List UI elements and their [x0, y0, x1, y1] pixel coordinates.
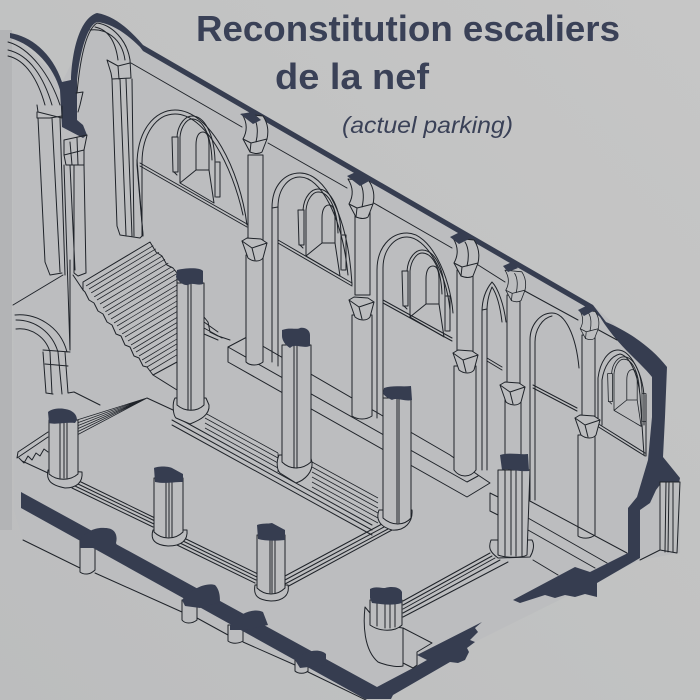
title: de la nef	[275, 56, 430, 97]
floor right and low walls	[490, 493, 627, 575]
stair band: F1 to F3	[172, 413, 378, 535]
dark wall buttress blobs	[80, 528, 326, 668]
engaged column E	[575, 310, 600, 538]
stair band: R1 to R2	[72, 482, 155, 527]
bottom wall outline	[23, 540, 368, 700]
engaged column C	[453, 238, 479, 476]
column R5 large pier	[490, 454, 533, 558]
column R2	[152, 466, 187, 546]
stair band: R3 to F3	[285, 524, 392, 588]
column F3	[378, 386, 412, 530]
arch 6 with window	[598, 350, 646, 456]
engaged column D	[500, 270, 526, 455]
column R1	[48, 408, 82, 488]
column R3	[255, 523, 288, 601]
title: Reconstitution escaliers	[196, 8, 620, 49]
lower left stair	[17, 398, 147, 473]
column F2	[277, 328, 312, 483]
wide arch 3 with window	[377, 233, 453, 422]
bottom wall section	[21, 492, 482, 699]
main staircase	[82, 242, 178, 376]
capital tops	[240, 112, 595, 316]
stair band: R4 to R5	[403, 553, 508, 617]
floor edges	[70, 260, 177, 410]
far-left arches and columns	[8, 23, 143, 350]
platform under nave arcade	[228, 337, 490, 497]
pointed arch	[482, 282, 506, 470]
column R4 and drum	[364, 587, 432, 668]
title	[196, 8, 620, 97]
platform lines	[228, 347, 478, 482]
wide arch 2 with window	[272, 173, 352, 366]
subtitle: (actuel parking)	[342, 112, 513, 138]
lower left arch	[15, 315, 100, 405]
left darker strip	[0, 30, 12, 530]
wall pilasters below bottom section	[80, 540, 308, 673]
upper wall lines	[131, 63, 645, 456]
wide arch 1 with window	[137, 110, 247, 236]
engaged column A	[242, 114, 268, 365]
arch 5	[530, 313, 579, 500]
column F1	[173, 268, 209, 424]
engaged column B	[348, 179, 374, 419]
stair band: R2 to R3	[177, 539, 258, 583]
right outer pilaster	[660, 482, 680, 553]
right pilaster flutes and floor line	[640, 482, 673, 560]
small steps behind column	[204, 317, 230, 340]
